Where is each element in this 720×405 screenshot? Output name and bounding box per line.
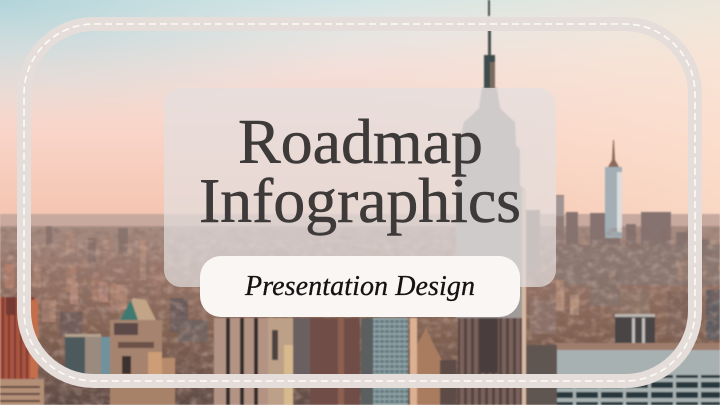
subtitle: Presentation Design	[244, 271, 475, 302]
Empire State Building	[456, 0, 526, 405]
brown and blue towers	[293, 318, 442, 405]
mid-city blocks	[4, 260, 720, 342]
rooftop strip	[556, 343, 720, 350]
grain overlay for dense buildings	[0, 228, 720, 405]
distant towers	[5, 226, 188, 313]
striped tan tower	[214, 318, 293, 405]
title line 2: Infographics	[199, 165, 521, 236]
skyscraper behind panel right edge	[526, 196, 564, 270]
subtitle pill	[200, 256, 520, 317]
title line 1: Roadmap	[238, 106, 483, 177]
dark foreground at bottom	[440, 360, 456, 405]
left red tower	[0, 297, 38, 379]
dark glass building	[65, 334, 111, 376]
city base	[0, 226, 720, 405]
horizon haze	[0, 214, 720, 236]
photo background: sky	[0, 0, 720, 225]
translucent title panel	[164, 88, 556, 287]
teal-roofed tower	[110, 298, 175, 405]
right-hand skyline	[556, 195, 720, 285]
dark frame building	[615, 314, 655, 345]
title	[199, 106, 521, 236]
lower-left roof building	[0, 379, 44, 405]
foreground grey building	[557, 350, 720, 405]
One World Trade Center	[605, 140, 622, 238]
